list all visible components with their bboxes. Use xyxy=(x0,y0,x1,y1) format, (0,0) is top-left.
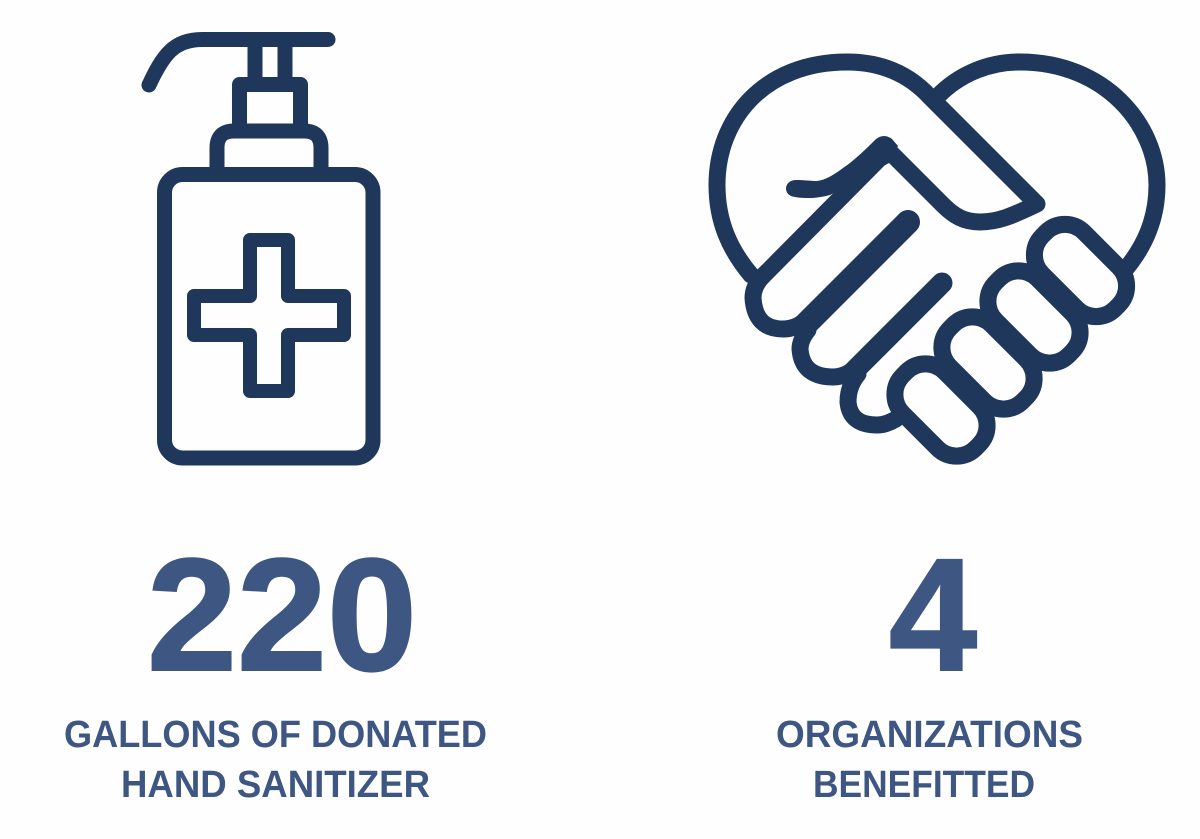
label: gallons of donated hand sanitizer xyxy=(64,714,487,806)
pump nozzle xyxy=(149,40,328,85)
thumb xyxy=(786,136,898,198)
medical cross xyxy=(194,240,344,391)
stat: 4: 4 xyxy=(889,525,977,704)
label: gallons of donated hand sanitizer: HAND SANITIZER xyxy=(121,764,430,806)
finger three outline xyxy=(848,374,896,425)
bottle neck xyxy=(217,131,321,174)
pump collar xyxy=(240,84,300,131)
right hand knuckles xyxy=(884,213,1138,467)
finger divider one xyxy=(805,222,908,325)
finger two outline xyxy=(800,330,850,377)
label: organizations benefitted: BENEFITTED xyxy=(813,764,1035,806)
finger divider two xyxy=(852,283,942,373)
stat: 220: 220 xyxy=(147,525,417,704)
bottle body xyxy=(164,174,373,458)
label: organizations benefitted xyxy=(776,714,1083,806)
icon: hand sanitizer pump bottle xyxy=(149,40,373,458)
heart right lobe xyxy=(937,62,1157,270)
finger one outline xyxy=(753,276,806,329)
icon: handshake heart xyxy=(717,62,1157,467)
heart left lobe and upper hand xyxy=(717,62,1037,276)
pump stem xyxy=(255,40,285,84)
label: gallons of donated hand sanitizer: GALLONS OF DONATED xyxy=(64,714,487,756)
label: organizations benefitted: ORGANIZATIONS xyxy=(776,714,1083,756)
